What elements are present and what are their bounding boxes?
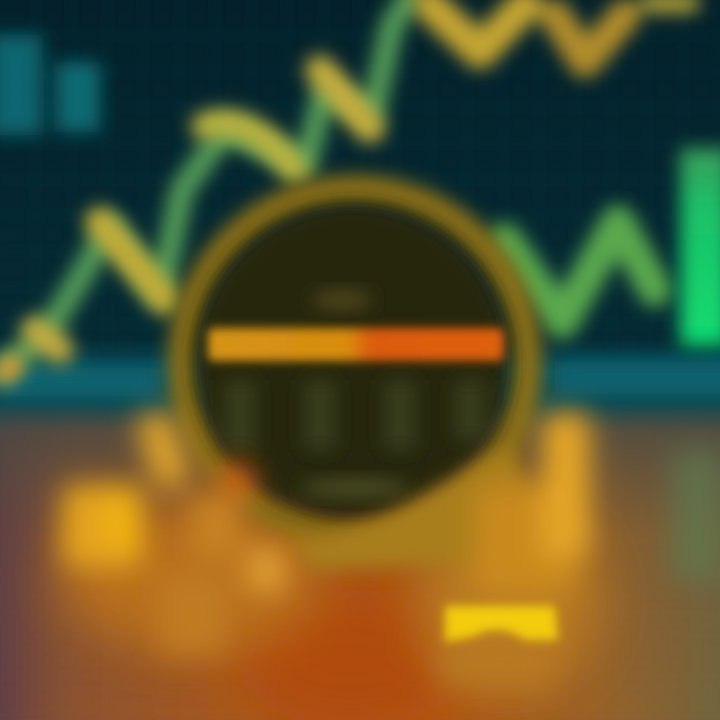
magnifier disc bbox=[183, 190, 527, 534]
green candle right bbox=[680, 148, 720, 346]
background bbox=[0, 340, 720, 720]
gold coin front bbox=[445, 606, 558, 642]
lens upper label bbox=[312, 290, 372, 310]
floor glow bbox=[60, 510, 600, 720]
magnifier lens bbox=[194, 204, 510, 520]
coin stack right bbox=[440, 412, 590, 684]
lens lower tint bbox=[290, 445, 530, 570]
lens lower text bbox=[300, 478, 410, 498]
table columns bbox=[225, 380, 485, 450]
coin pile left bbox=[62, 407, 284, 655]
magnifier rim bbox=[183, 190, 527, 534]
progress bar bbox=[208, 328, 504, 361]
chart line left, green bbox=[0, 0, 655, 372]
teal bars top-left bbox=[0, 35, 100, 135]
chart line highlights, yellow bbox=[5, 3, 690, 372]
